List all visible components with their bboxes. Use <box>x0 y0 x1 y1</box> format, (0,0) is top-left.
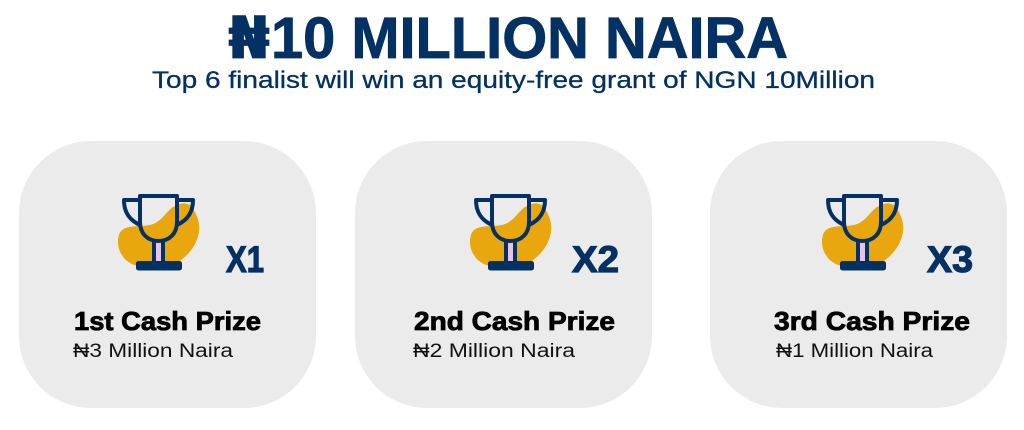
multiplier: X3 <box>927 239 973 280</box>
icon: trophy <box>822 196 903 270</box>
card background <box>355 141 652 408</box>
prize title: 1st Cash Prize <box>74 306 261 336</box>
heading: prize total: 10 MILLION NAIRA <box>271 6 788 71</box>
multiplier: X2 <box>572 239 619 280</box>
prize title: 3rd Cash Prize <box>774 306 970 336</box>
multiplier: X1 <box>226 239 264 280</box>
prize amount: ₦2 Million Naira <box>413 341 576 362</box>
icon: trophy <box>118 196 199 270</box>
subheading: Top 6 finalist will win an equity-free grant of NGN 10Million <box>152 67 875 94</box>
icon: trophy <box>470 196 551 270</box>
card background <box>710 141 1007 408</box>
panel: 3rd cash prize <box>710 141 1007 408</box>
panel: 2nd cash prize <box>355 141 652 408</box>
prize amount: ₦3 Million Naira <box>73 341 233 362</box>
prize title: 2nd Cash Prize <box>414 306 615 336</box>
heading: prize total: ₦ <box>228 4 270 72</box>
prize amount: ₦1 Million Naira <box>776 341 933 362</box>
panel: 1st cash prize <box>19 141 316 408</box>
card background <box>19 141 316 408</box>
